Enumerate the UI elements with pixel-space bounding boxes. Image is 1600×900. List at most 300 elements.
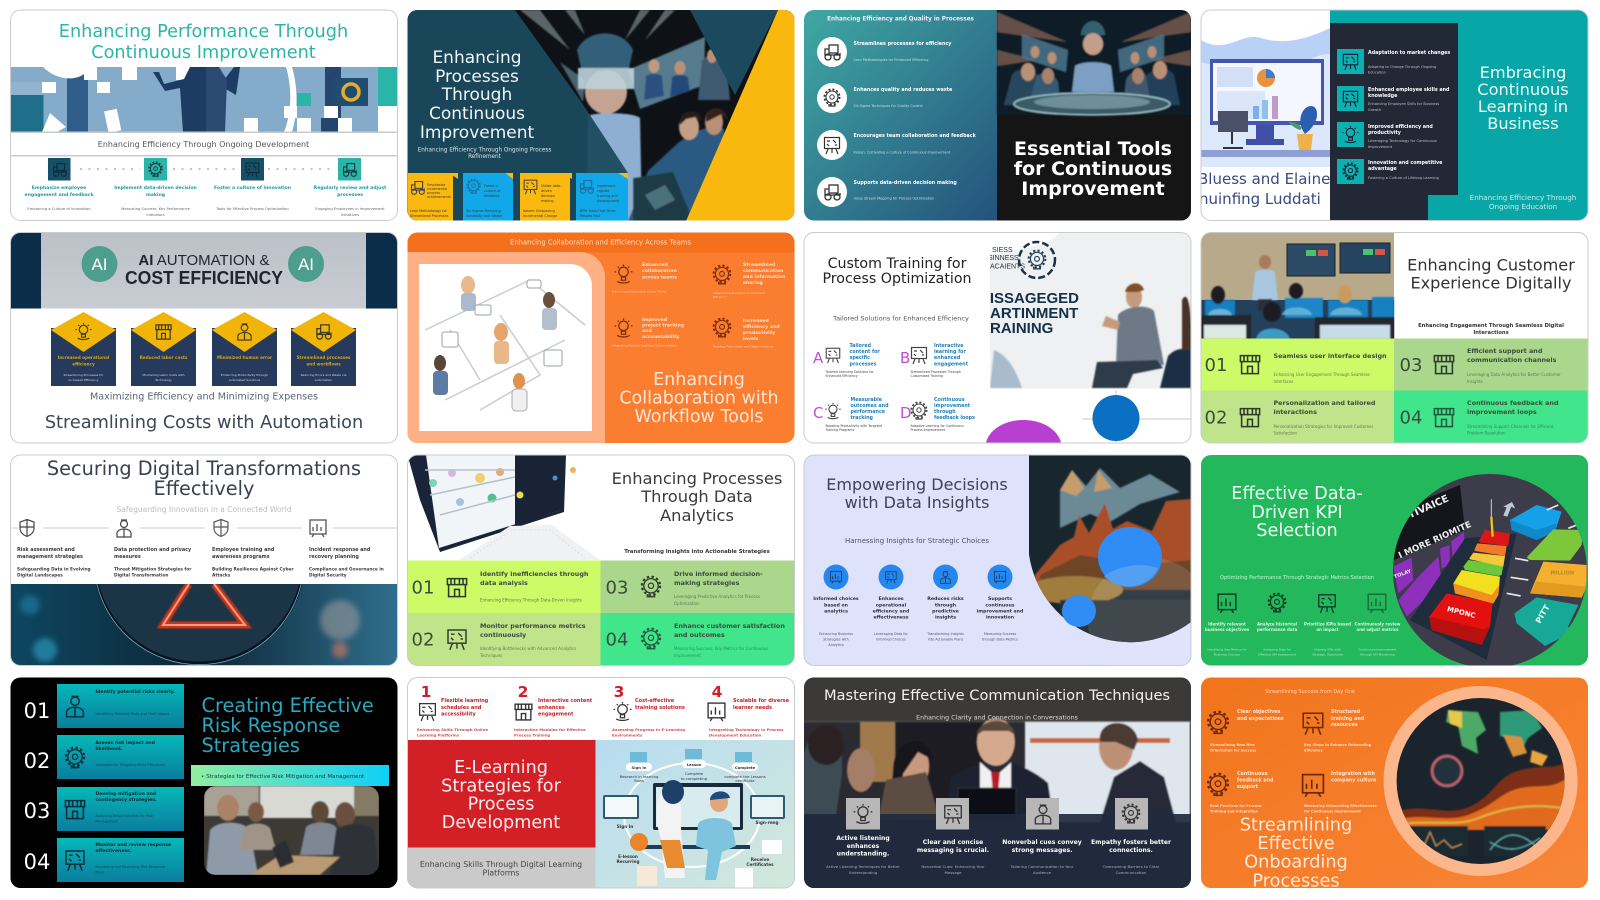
four steps bbox=[1205, 594, 1401, 656]
risk labels: Digital Security bbox=[309, 572, 347, 578]
photo: presenter with slide text: DISSAGEGED bbox=[979, 290, 1079, 307]
mini cards row: achievements bbox=[427, 195, 451, 199]
mini cards row: incremental bbox=[427, 187, 447, 191]
four steps: through KPI Monitoring bbox=[1360, 652, 1395, 656]
header banner: AI AUTOMATION & bbox=[138, 252, 270, 269]
e-learning illustration: Lesson bbox=[687, 762, 702, 767]
four icon columns: continuous bbox=[985, 602, 1015, 608]
quadrant grid: Enhancing Efficiency Through Data-Driven Insights bbox=[480, 598, 582, 602]
title: Processes bbox=[1252, 872, 1340, 892]
mini cards row: Results Fast bbox=[580, 214, 601, 218]
risk labels bbox=[17, 547, 384, 578]
grey subtitle panel: Enhancing Skills Through Digital Learning bbox=[420, 860, 582, 869]
list items: Adapting to Change Through Ongoing bbox=[1368, 65, 1436, 69]
title: Risk Response bbox=[202, 714, 340, 737]
title: Analytics bbox=[660, 506, 734, 525]
photo: team meeting bbox=[204, 786, 380, 875]
lettered items: feedback loops bbox=[934, 415, 975, 421]
four benefit cards: Automated Solutions bbox=[229, 378, 261, 382]
lettered items: D bbox=[900, 404, 912, 422]
quadrant grid: 04 bbox=[606, 630, 628, 650]
step labels: Foster a culture of innovation bbox=[214, 185, 291, 191]
list items: advantage bbox=[1368, 166, 1397, 172]
e-learning illustration: complete the Lessons bbox=[724, 774, 766, 779]
list items: Improvement bbox=[1368, 145, 1393, 149]
list items: Innovation and competitive bbox=[1368, 160, 1443, 166]
mini cards row: training and bbox=[597, 194, 618, 198]
four steps: Business Success bbox=[1214, 652, 1241, 656]
photo: presenter with slide text: SINNESS: bbox=[988, 255, 1021, 262]
mini cards row: feedback bbox=[484, 194, 500, 198]
mini cards row: Implement bbox=[597, 184, 616, 188]
title: Through bbox=[441, 85, 512, 105]
numbered risk steps: Monitoring and Reviewing Risk Response bbox=[96, 865, 165, 869]
numbered items: schedules and bbox=[441, 705, 482, 711]
photo: contact centre training bbox=[1201, 232, 1394, 339]
numbered risk steps: contingency strategies. bbox=[96, 797, 157, 803]
numbered items: 3 bbox=[614, 683, 624, 701]
quadrant grid: continuously bbox=[480, 631, 527, 639]
technique sublabels: Communication bbox=[1116, 870, 1147, 875]
list items: productivity bbox=[1368, 130, 1402, 136]
strategy strip bbox=[191, 765, 389, 786]
blue bubbles bbox=[1062, 527, 1162, 627]
subtitle: Optimizing Performance Through Strategic Metrics Selection bbox=[1220, 575, 1374, 581]
onboarding items: training and bbox=[1331, 716, 1365, 722]
lettered items: Interactive bbox=[934, 343, 964, 349]
lettered items: specific bbox=[850, 355, 870, 361]
quadrant grid: Efficient support and bbox=[1467, 347, 1543, 355]
title: Enhancing bbox=[653, 370, 745, 390]
quadrant grid: 01 bbox=[1205, 355, 1227, 376]
subtitle: Enhancing Efficiency Through Ongoing Development bbox=[98, 140, 309, 149]
numbered risk steps: Identifying Potential Risks and Their Impact bbox=[96, 712, 170, 716]
onboarding items: and expectations bbox=[1237, 716, 1284, 722]
slide card: Embracing Continuous Learning in Business bbox=[1198, 10, 1588, 221]
photo: woman with visor and team bbox=[520, 10, 730, 221]
slide card: Securing Digital Transformations Effectively bbox=[10, 453, 398, 666]
lettered items: content for bbox=[850, 349, 880, 355]
mini cards row: Streamlined Processes bbox=[410, 214, 449, 218]
numbered risk steps: Assess risk impact and bbox=[96, 740, 155, 746]
subtitle: Refinement bbox=[468, 154, 502, 160]
title: Streamlining Costs with Automation bbox=[45, 413, 363, 433]
benefit grid: collaboration bbox=[642, 268, 677, 274]
numbered risk steps: Strategies for Mitigating Risks Effectively bbox=[96, 763, 165, 767]
timeline icons bbox=[12, 520, 398, 537]
top heading: Streamlining Success from Day One bbox=[1265, 689, 1355, 695]
numbered risk steps: 03 bbox=[24, 799, 50, 823]
numbered risk steps: 04 bbox=[24, 850, 50, 874]
left heading: Enhancing Efficiency and Quality in Processes bbox=[827, 16, 975, 22]
step sublabels: Indicators bbox=[146, 213, 165, 217]
four icon columns: Reduces risks bbox=[927, 596, 964, 602]
e-learning illustration: Research in learning bbox=[620, 774, 659, 779]
mini cards row: Kaizen: Embracing bbox=[523, 209, 555, 213]
photo: presenter with slide text: RAINING bbox=[990, 320, 1053, 337]
lettered items: performance bbox=[850, 409, 886, 415]
four steps: Identifying Key Metrics for bbox=[1207, 648, 1247, 652]
onboarding items: Key Steps to Enhance Onboarding bbox=[1304, 743, 1372, 747]
benefit list bbox=[817, 37, 977, 207]
3D KPI staircase in circle: TIVAICE bbox=[1407, 493, 1451, 521]
quadrant grid: 02 bbox=[1205, 408, 1227, 428]
numbered items: 1 bbox=[421, 683, 431, 701]
quadrant grid: Enhancing User Engagement Through Seamless bbox=[1274, 372, 1370, 377]
red title panel bbox=[408, 740, 596, 848]
onboarding items: Measuring Onboarding Effectiveness bbox=[1304, 804, 1377, 808]
numbered items: Flexible learning bbox=[441, 698, 489, 704]
risk labels: Data protection and privacy bbox=[114, 547, 192, 553]
technique labels: strong messages. bbox=[1012, 847, 1072, 854]
four icon columns bbox=[813, 564, 1023, 647]
slide card: Custom Training for Process Optimization bbox=[813, 233, 1190, 442]
e-learning illustration: Recurring bbox=[616, 859, 640, 864]
step labels: processes bbox=[337, 192, 363, 198]
icon tiles bbox=[846, 798, 1148, 830]
title: Business bbox=[1487, 114, 1559, 133]
four icon columns: Informed Choices bbox=[876, 638, 906, 642]
onboarding items bbox=[1208, 709, 1377, 814]
numbered items: engagement bbox=[538, 712, 574, 718]
3D KPI staircase in circle bbox=[1390, 470, 1590, 670]
quadrant grid: Identify inefficiencies through bbox=[480, 570, 589, 578]
lettered items: processes bbox=[850, 362, 877, 368]
quadrant grid: Enhance customer satisfaction bbox=[674, 622, 785, 630]
numbered risk steps: Monitor and review response bbox=[96, 842, 171, 848]
title: Continuous bbox=[429, 104, 525, 124]
benefit grid: Streamlining Processes for Increased bbox=[713, 291, 765, 295]
four steps: Analyzing Data for bbox=[1263, 648, 1292, 652]
quadrant grid: making strategies bbox=[674, 579, 740, 587]
title: Learning in bbox=[1478, 97, 1568, 116]
photo: people talking bbox=[804, 678, 1191, 822]
onboarding items: Structured bbox=[1331, 709, 1361, 715]
onboarding items: support bbox=[1237, 784, 1259, 790]
title: Effectively bbox=[154, 477, 254, 500]
four icon columns: analytics bbox=[824, 608, 848, 614]
e-learning illustration: Complete bbox=[685, 771, 704, 776]
onboarding items: feedback and bbox=[1237, 778, 1274, 784]
numbered risk steps: Management bbox=[96, 820, 119, 824]
technique labels: enhances bbox=[847, 843, 880, 850]
benefit list: Supports data-driven decision making bbox=[854, 180, 957, 186]
red title panel: Process bbox=[468, 794, 534, 814]
title: Improvement bbox=[1021, 178, 1165, 200]
slide card: Essential Tools for Continuous Improvement bbox=[804, 10, 1191, 221]
step labels: Implement data-driven decision bbox=[114, 185, 197, 191]
quadrant grid: improvement loops bbox=[1467, 408, 1537, 416]
technique labels: connections. bbox=[1109, 847, 1153, 854]
technique labels: Clear and concise bbox=[923, 839, 983, 846]
quadrant grid: Streamlining Support Channels for Efficient bbox=[1467, 424, 1554, 429]
mini cards row: making bbox=[541, 199, 554, 203]
step sublabels: Measuring Success: Key Performance bbox=[121, 207, 191, 211]
lettered items: Boosting Productivity with Targeted bbox=[826, 424, 882, 428]
quadrant grid: Seamless user interface design bbox=[1274, 352, 1387, 360]
numbered items: 2 bbox=[518, 683, 528, 701]
title: Effective bbox=[1257, 834, 1335, 854]
onboarding items: Efficiency bbox=[1304, 748, 1324, 752]
risk labels: awareness programs bbox=[212, 554, 270, 560]
onboarding items: company culture bbox=[1331, 778, 1377, 784]
photo: team around holographic table bbox=[997, 10, 1191, 115]
four steps: Prioritize KPIs based bbox=[1304, 622, 1351, 626]
technique labels: understanding. bbox=[837, 850, 889, 858]
title: Streamlining bbox=[1240, 816, 1352, 836]
numbered items: Interactive Modules for Effective bbox=[514, 727, 586, 732]
photo: presenter with slide text bbox=[979, 232, 1191, 388]
risk labels: Employee training and bbox=[212, 547, 275, 553]
mini cards row: Foster a bbox=[484, 184, 498, 188]
four icon columns: based on bbox=[824, 602, 848, 608]
benefit list: Encourages team collaboration and feedback bbox=[854, 133, 977, 139]
benefit list: Lean Methodologies for Enhanced Efficiency bbox=[854, 58, 928, 62]
technique sublabels: Audience bbox=[1033, 870, 1052, 875]
numbered risk steps: effectiveness. bbox=[96, 848, 132, 854]
title: Workflow Tools bbox=[634, 407, 764, 427]
numbered items: Integrating Technology in Process bbox=[709, 727, 784, 732]
lettered items: B bbox=[900, 349, 910, 367]
four steps: Analyze historical bbox=[1257, 622, 1298, 626]
quadrant grid: 02 bbox=[412, 630, 434, 650]
photo: presenter with slide text: ARTINMENT bbox=[990, 305, 1078, 322]
quadrant grid: data analysis bbox=[480, 579, 528, 587]
slide card: Streamlining Effective Onboarding Processes bbox=[1201, 678, 1588, 892]
lettered items: Streamlined Processes Through bbox=[910, 370, 961, 374]
benefit list: Streamlines processes for efficiency bbox=[854, 41, 952, 47]
four icon columns: Transforming Insights bbox=[926, 632, 964, 636]
title: Essential Tools bbox=[1014, 138, 1172, 160]
slide card: Effective Data-Driven KPI Selection bbox=[1201, 455, 1590, 670]
benefit grid: Improved bbox=[642, 317, 667, 323]
title: Improvement bbox=[420, 123, 535, 143]
quadrant grid: Satisfaction bbox=[1274, 430, 1297, 436]
quadrant grid: Personalization and tailored bbox=[1274, 399, 1376, 407]
lettered items: Tailored Learning Solutions for bbox=[824, 370, 874, 374]
numbered items: Environments bbox=[612, 732, 643, 738]
subtitle: Maximizing Efficiency and Minimizing Expenses bbox=[90, 392, 318, 402]
quadrant grid bbox=[408, 560, 794, 666]
step sublabels: Tools for Effective Process Optimization bbox=[215, 207, 289, 211]
technique sublabels: Understanding bbox=[849, 870, 878, 875]
mini cards row: regular bbox=[597, 189, 610, 193]
four icon columns: through bbox=[935, 602, 956, 608]
four steps: Aligning KPIs with bbox=[1314, 648, 1341, 652]
step labels: engagement and feedback bbox=[24, 192, 94, 198]
technique sublabels: Message bbox=[944, 870, 962, 875]
benefit grid: levels bbox=[743, 336, 759, 342]
quadrant grid: Techniques bbox=[479, 653, 502, 658]
numbered items: Interactive content bbox=[538, 698, 593, 704]
mini cards row: decision bbox=[541, 194, 555, 198]
quadrant grid: Drive informed decision- bbox=[674, 570, 763, 578]
subtitle: Safeguarding Innovation in a Connected World bbox=[117, 505, 292, 514]
title: Onboarding bbox=[1244, 852, 1348, 872]
lettered items: Adaptive Learning for Continuous bbox=[910, 424, 964, 428]
quadrant grid: 03 bbox=[606, 578, 628, 598]
numbered items: Assessing Progress in E-Learning bbox=[612, 727, 685, 732]
four icon columns: operational bbox=[876, 602, 907, 608]
step sublabels bbox=[28, 208, 384, 216]
risk labels: Attacks bbox=[212, 572, 231, 578]
benefit grid: communication bbox=[743, 268, 783, 274]
four benefit cards bbox=[51, 312, 356, 386]
benefit list: Enhances quality and reduces waste bbox=[854, 87, 953, 93]
photo: data landscape in circle bbox=[1027, 455, 1191, 645]
header banner: COST EFFICIENCY bbox=[125, 268, 283, 288]
left text: nuinfing Luddati bbox=[1199, 190, 1321, 208]
mini cards row: Variability and Waste bbox=[466, 214, 502, 218]
technique sublabels: Active Listening Techniques for Better bbox=[826, 864, 900, 869]
decorative circles bbox=[986, 390, 1191, 474]
four icon columns: Strategies with bbox=[823, 638, 849, 642]
lettered items: enhanced bbox=[934, 355, 961, 361]
mini cards row: Incremental Change bbox=[523, 214, 557, 218]
technique sublabels bbox=[826, 864, 1160, 875]
onboarding items: Training and Integration bbox=[1210, 810, 1258, 814]
photo: monitor with process diagram bbox=[408, 455, 600, 560]
numbered items bbox=[417, 683, 790, 738]
quadrant grid: communication channels bbox=[1467, 356, 1557, 364]
title: Enhancing Customer bbox=[1407, 256, 1575, 274]
title: Enhancing bbox=[432, 48, 522, 68]
quadrant grid: 03 bbox=[1400, 355, 1422, 376]
numbered items: accessibility bbox=[441, 712, 476, 718]
3D KPI staircase in circle: MILLION bbox=[1551, 571, 1574, 577]
title: Custom Training for bbox=[828, 256, 967, 272]
quadrant grid: Interfaces bbox=[1274, 379, 1294, 384]
benefit grid: productivity bbox=[743, 330, 775, 336]
four benefit cards: Technology bbox=[154, 378, 172, 382]
mini cards row: Utilize data- bbox=[541, 184, 562, 188]
lettered items: C bbox=[813, 404, 823, 422]
3D KPI staircase in circle: TOLAY bbox=[1393, 568, 1412, 580]
title: Selection bbox=[1256, 521, 1338, 541]
subtitle: Enhancing Efficiency Through Ongoing Process bbox=[418, 148, 551, 154]
benefit grid: and bbox=[642, 328, 652, 334]
title: Securing Digital Transformations bbox=[47, 457, 361, 480]
four icon columns: innovation bbox=[986, 614, 1014, 620]
subtitle: Ongoing Education bbox=[1489, 202, 1557, 211]
lettered items: engagement bbox=[934, 362, 969, 368]
quadrant grid: Measuring Success: Key Metrics for Continuous bbox=[674, 646, 768, 651]
risk labels: Threat Mitigation Strategies for bbox=[114, 566, 192, 572]
benefit grid: Efficiency bbox=[713, 295, 727, 299]
ring with dashboard photo bbox=[1384, 686, 1578, 876]
slide card: Empowering Decisions with Data Insights bbox=[804, 455, 1212, 682]
risk labels: management strategies bbox=[17, 554, 83, 560]
numbered risk steps: Plans bbox=[96, 870, 105, 874]
four benefit cards: Increased operational bbox=[58, 355, 110, 360]
benefit grid: sharing bbox=[743, 280, 763, 286]
e-learning illustration bbox=[596, 740, 794, 889]
lettered items: Measurable bbox=[850, 397, 883, 403]
quadrant grid: Leveraging Data Analytics for Better Customer bbox=[1467, 372, 1561, 377]
list items: Leveraging Technology for Continuous bbox=[1368, 139, 1437, 143]
numbered items: enhances bbox=[538, 705, 565, 711]
title: Effective Data- bbox=[1231, 484, 1363, 504]
list items bbox=[1337, 49, 1450, 184]
title: Continuous Improvement bbox=[91, 43, 316, 63]
onboarding items: Integration with bbox=[1331, 771, 1375, 777]
risk labels: Safeguarding Data in Evolving bbox=[17, 566, 91, 572]
benefit grid: and information bbox=[743, 274, 785, 280]
four benefit cards: Minimizing Labor Costs with bbox=[142, 373, 185, 377]
lettered items: Enhanced Efficiency bbox=[826, 374, 858, 378]
yellow diagonal shape bbox=[686, 10, 795, 221]
title: Creating Effective bbox=[202, 694, 374, 717]
technique labels: messaging is crucial. bbox=[917, 847, 989, 854]
step labels bbox=[24, 186, 386, 197]
red title panel: Development bbox=[442, 813, 560, 833]
quadrant grid bbox=[1201, 338, 1588, 444]
numbered risk steps: Assigning Responsibilities for Risk bbox=[96, 814, 153, 818]
mini cards row: Emphasize bbox=[427, 183, 445, 187]
left illustration: monitor with charts bbox=[1201, 10, 1330, 221]
top dark overlay bbox=[804, 678, 1191, 720]
step labels: making bbox=[146, 192, 165, 198]
numbered risk steps bbox=[24, 684, 184, 882]
bottom overlay bbox=[804, 814, 1191, 888]
four benefit cards: Automation bbox=[315, 378, 332, 382]
benefit list: Six Sigma Techniques for Quality Control bbox=[854, 104, 923, 108]
four steps: Effective KPI Assessment bbox=[1258, 652, 1297, 656]
title: Process Optimization bbox=[822, 271, 972, 287]
benefit grid: Streamlined bbox=[743, 262, 775, 268]
list items: Education bbox=[1368, 70, 1386, 74]
technique labels: Empathy fosters better bbox=[1091, 839, 1171, 846]
title: Enhancing Processes bbox=[612, 469, 782, 488]
four steps: Strategic Objectives bbox=[1312, 652, 1343, 656]
quadrant grid: 04 bbox=[1400, 408, 1422, 428]
list items: Fostering a Culture of Lifelong Learning bbox=[1368, 176, 1439, 180]
title: Processes bbox=[435, 67, 519, 87]
four steps: on impact bbox=[1316, 627, 1339, 632]
risk labels: measures bbox=[114, 554, 141, 560]
subtitle: Enhancing Engagement Through Seamless Digital bbox=[1418, 323, 1564, 329]
four benefit cards: Reduced labor costs bbox=[140, 355, 188, 360]
lettered items bbox=[813, 343, 975, 432]
lettered items: improvement bbox=[934, 403, 971, 409]
step labels: Emphasize employee bbox=[32, 185, 86, 191]
four steps: Continuous Improvement bbox=[1358, 648, 1397, 652]
risk labels: Risk assessment and bbox=[17, 547, 75, 553]
four icon columns: Enhances bbox=[878, 596, 904, 602]
four steps: Identify relevant bbox=[1208, 622, 1246, 626]
risk labels: Compliance and Governance in bbox=[309, 566, 384, 572]
mini cards row: process bbox=[427, 191, 440, 195]
four icon columns: improvement and bbox=[977, 608, 1023, 614]
e-learning illustration: to completing bbox=[681, 776, 708, 781]
quadrant grid: Insights bbox=[1467, 379, 1483, 384]
onboarding items: Orientation for Success bbox=[1210, 748, 1256, 752]
dark list panel bbox=[1330, 23, 1458, 221]
quadrant grid: and outcomes bbox=[674, 631, 725, 639]
benefit grid: Enhancing Collaboration Across Teams bbox=[612, 290, 666, 294]
benefit grid: accountability bbox=[642, 334, 680, 340]
benefit list: Value Stream Mapping for Process Optimization bbox=[854, 196, 934, 200]
technique labels: Nonverbal cues convey bbox=[1002, 839, 1082, 846]
numbered items: Enhancing Skills Through Online bbox=[417, 727, 488, 732]
benefit grid: project tracking bbox=[642, 322, 684, 328]
four icon columns: Analytics bbox=[828, 643, 844, 647]
risk labels: Incident response and bbox=[309, 547, 371, 553]
translucent glass circle bbox=[1088, 558, 1212, 682]
four icon columns: Informed choices bbox=[813, 596, 859, 602]
e-learning illustration: Certificates bbox=[746, 862, 774, 867]
grey subtitle panel: Platforms bbox=[483, 868, 519, 878]
